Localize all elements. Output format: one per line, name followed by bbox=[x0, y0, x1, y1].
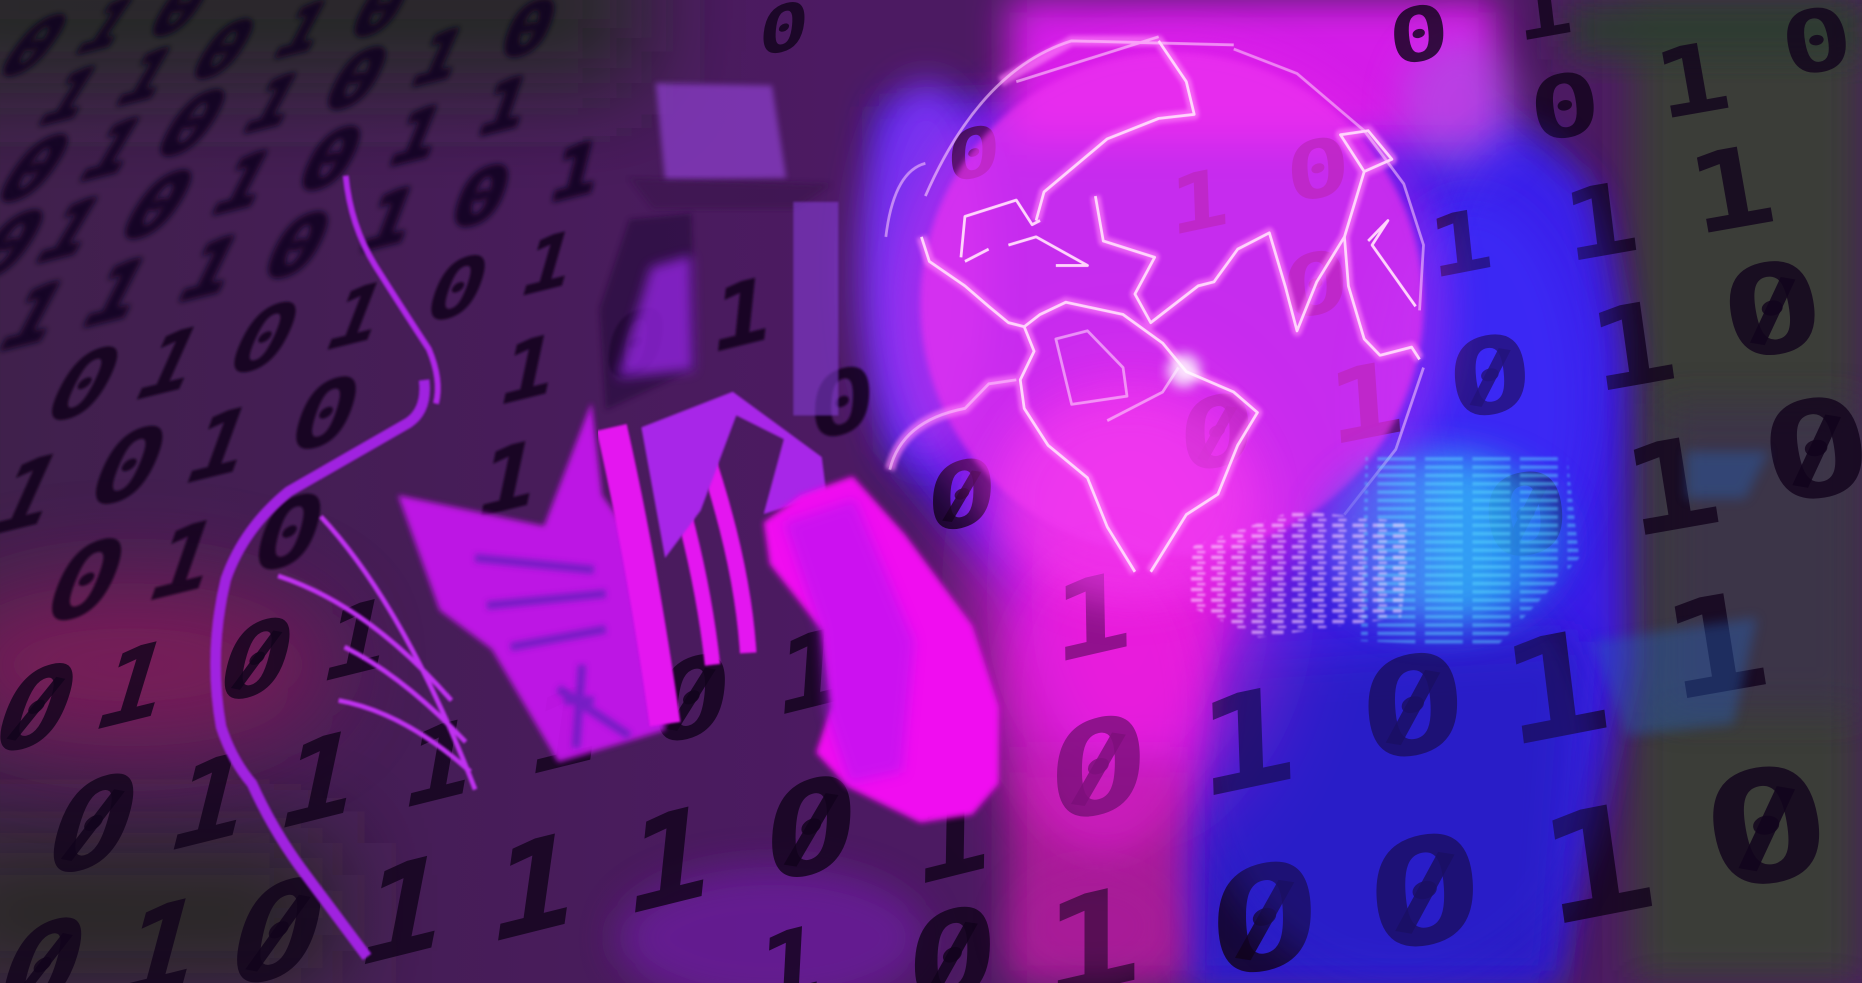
distant digits, top left: 1 bbox=[399, 10, 480, 104]
near digits, right: 1 bbox=[1528, 767, 1666, 961]
distant digits, top left: 0 bbox=[308, 28, 405, 132]
mid digits, left: 1 bbox=[491, 314, 567, 427]
continents glow bbox=[890, 41, 1420, 572]
near digits, right: 1 bbox=[1423, 189, 1498, 298]
distant digits, top left: 0 bbox=[247, 192, 347, 302]
near digits, right: 1 bbox=[1556, 159, 1645, 285]
halo bbox=[893, 32, 1451, 590]
digital glitter bbox=[1187, 451, 1769, 736]
near digits, right: 0 bbox=[925, 436, 999, 557]
mid digits, left: 0 bbox=[275, 352, 376, 477]
distant digits, top left: 1 bbox=[23, 49, 118, 144]
mid digits, left: 0 bbox=[25, 323, 142, 449]
shirt shadow streaks bbox=[475, 558, 629, 748]
near digits, lower left: 1 bbox=[521, 658, 610, 802]
near digits, lower left: 1 bbox=[619, 774, 721, 948]
mid digits, left: 0 bbox=[209, 279, 318, 400]
near digits, right: 1 bbox=[1052, 546, 1133, 689]
near digits, right: 1 bbox=[1652, 562, 1779, 732]
distant digits, top left: 1 bbox=[229, 55, 318, 152]
distant digits, top left: 0 bbox=[439, 145, 523, 249]
near digits, right: 1 bbox=[1168, 149, 1231, 255]
near digits, right: 0 bbox=[1441, 308, 1540, 447]
distant digits, top left: 1 bbox=[63, 99, 163, 200]
near digits, right: 0 bbox=[1282, 117, 1354, 223]
distant digits, top left bbox=[0, 0, 610, 372]
near digits, lower left: 0 bbox=[758, 743, 864, 917]
light wash over digits bbox=[1003, 131, 1615, 983]
hat bbox=[656, 83, 786, 180]
near digits, right: 1 bbox=[1678, 120, 1784, 260]
cyan scanlines bbox=[1361, 457, 1579, 647]
near digits, lower left: 1 bbox=[394, 693, 485, 836]
distant digits, top left: 1 bbox=[348, 168, 431, 271]
distant digits, top left: 0 bbox=[174, 0, 273, 99]
mid digits, left: 1 bbox=[511, 211, 587, 316]
hat brim bbox=[629, 178, 831, 209]
mid digits, left: 1 bbox=[467, 418, 550, 541]
distant digits, top left: 1 bbox=[19, 177, 122, 283]
cyan glow bbox=[1318, 455, 1567, 626]
arm shading bbox=[784, 499, 914, 784]
globe disc bbox=[920, 52, 1424, 556]
near digits, right: 1 bbox=[1492, 597, 1619, 780]
face bbox=[600, 214, 696, 410]
distant digits, top left: 0 bbox=[100, 149, 214, 264]
distant digits, top left: 0 bbox=[282, 107, 378, 213]
near digits, lower left: 1 bbox=[480, 800, 589, 976]
haze at right bbox=[1591, 451, 1769, 736]
globe bbox=[886, 32, 1451, 605]
near digits, lower left: 1 bbox=[267, 701, 373, 859]
mid digits, left: 0 bbox=[26, 511, 146, 652]
near digits, right: 0 bbox=[946, 108, 1002, 200]
distant digits, top left: 1 bbox=[468, 59, 542, 154]
near digits, right: 0 bbox=[1278, 229, 1353, 341]
near digits, lower left: 1 bbox=[772, 602, 850, 742]
near digits, right: 1 bbox=[1581, 275, 1685, 419]
person bbox=[216, 83, 999, 957]
shirt left panel bbox=[398, 402, 665, 762]
mid digits, left: 1 bbox=[134, 495, 235, 626]
near digits, lower left: 1 bbox=[913, 761, 992, 913]
mid digits, left: 0 bbox=[595, 285, 675, 404]
near digits, lower left: 0 bbox=[27, 740, 159, 910]
hair outline bbox=[346, 176, 438, 404]
distant digits, top left: 1 bbox=[197, 131, 290, 234]
distant digits, top left: 1 bbox=[377, 89, 457, 184]
shirt front stripes bbox=[612, 427, 748, 724]
distant digits, top left: 1 bbox=[542, 124, 610, 220]
near digits, right: 1 bbox=[1646, 20, 1738, 142]
centre glow bbox=[997, 392, 1259, 605]
near digits, lower left: 1 bbox=[312, 575, 401, 707]
wall strip bbox=[793, 202, 838, 416]
near digits, right: 0 bbox=[1687, 729, 1846, 928]
distant digits, top left: 0 bbox=[136, 70, 246, 180]
near digits, right: 0 bbox=[1047, 683, 1150, 856]
mid digits, left: 0 bbox=[806, 343, 877, 464]
near digits, right: 0 bbox=[1353, 619, 1473, 796]
face highlight bbox=[618, 255, 694, 378]
near digits, right: 1 bbox=[1323, 338, 1408, 469]
near digits, lower left bbox=[0, 575, 1000, 983]
continents outlines bbox=[886, 37, 1424, 572]
near digits, right: 0 bbox=[1523, 51, 1607, 163]
specular spark bbox=[1167, 354, 1200, 387]
distant digits, top left: 1 bbox=[101, 30, 191, 124]
near digits, lower left: 1 bbox=[155, 723, 266, 882]
sleeve folds bbox=[278, 516, 475, 789]
mid digits, left: 0 bbox=[70, 399, 187, 534]
near digits, lower left: 1 bbox=[80, 615, 187, 758]
near digits, right bbox=[755, 0, 1862, 983]
mid digits, left: 1 bbox=[171, 383, 269, 508]
mid digits, left: 0 bbox=[238, 469, 340, 599]
hand bbox=[641, 392, 827, 558]
near digits, right: 0 bbox=[1709, 232, 1836, 391]
near digits, right: 1 bbox=[1613, 407, 1731, 566]
distant digits, top left: 1 bbox=[67, 238, 167, 348]
continents bbox=[886, 37, 1424, 572]
body outline bbox=[216, 380, 425, 957]
mid digits, left: 1 bbox=[707, 254, 778, 375]
mid digits, left: 1 bbox=[312, 262, 401, 372]
near digits, right: 0 bbox=[1176, 369, 1258, 498]
near digits, lower left: 0 bbox=[204, 590, 309, 730]
arm bbox=[764, 476, 999, 823]
mid digits, left: 1 bbox=[119, 303, 221, 423]
color glow: blue and magenta light bbox=[861, 0, 1627, 983]
near digits, right: 1 bbox=[1194, 654, 1299, 830]
near digits, lower left: 0 bbox=[643, 625, 739, 774]
mid digits, left: 0 bbox=[412, 234, 503, 345]
mid digits, left bbox=[0, 211, 877, 652]
near digits, right: 0 bbox=[1473, 445, 1579, 588]
distant digits, top left: 1 bbox=[163, 217, 257, 322]
pink speckle bbox=[1187, 510, 1413, 638]
zero slashes bbox=[11, 278, 1844, 983]
